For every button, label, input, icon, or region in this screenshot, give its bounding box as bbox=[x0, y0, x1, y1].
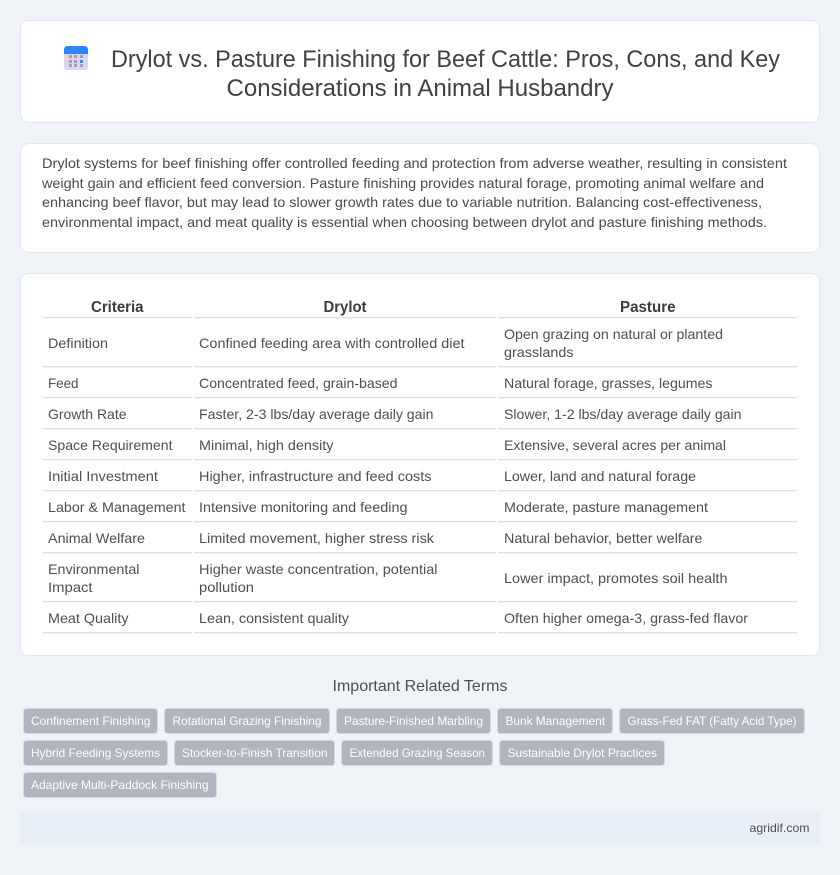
row: Definition: Definition bbox=[48, 335, 108, 351]
tag: Grass-Fed FAT bbox=[620, 708, 804, 734]
tag: Sustainable Drylot Practices bbox=[500, 740, 664, 766]
row: Labor & Management bbox=[48, 499, 708, 515]
table header row: Drylot bbox=[324, 299, 367, 316]
row: Animal Welfare bbox=[48, 530, 703, 546]
row: Definition: Open grazing on natural or planted bbox=[504, 326, 723, 342]
row: Feed bbox=[48, 375, 712, 391]
tag: Rotational Grazing Finishing: Rotational Grazing Finishing bbox=[172, 714, 322, 728]
row: Animal Welfare: Limited movement, higher stress risk bbox=[199, 530, 435, 546]
title: Drylot vs. Pasture Finishing for Beef Cattle: Pros, Cons, and Key bbox=[111, 46, 780, 73]
tag: Hybrid Feeding Systems bbox=[24, 740, 168, 766]
title: Considerations in Animal Husbandry bbox=[226, 75, 614, 102]
row: Meat Quality: Often higher omega-3, grass-fed flavor bbox=[504, 610, 748, 626]
title bbox=[111, 46, 780, 102]
icon: calendar bbox=[64, 46, 88, 70]
row: Labor & Management: Moderate, pasture management bbox=[504, 499, 708, 515]
tag: Confinement Finishing bbox=[24, 708, 158, 734]
tag: Confinement Finishing: Confinement Finishing bbox=[31, 714, 150, 728]
row: Initial Investment: Higher, infrastructure and feed costs bbox=[199, 468, 432, 484]
row: Meat Quality: Lean, consistent quality bbox=[199, 610, 349, 626]
row: Space Requirement bbox=[48, 437, 726, 453]
panel: description bbox=[20, 144, 820, 252]
tag: Pasture-Finished Marbling: Pasture-Finished Marbling bbox=[344, 714, 483, 728]
row: Animal Welfare: Natural behavior, better welfare bbox=[504, 530, 703, 546]
header panel bbox=[20, 20, 820, 122]
footer bar bbox=[20, 811, 820, 845]
row: Definition: grasslands bbox=[504, 344, 574, 360]
row: Definition bbox=[48, 326, 723, 360]
text block: description paragraph: Drylot systems for beef finishing offer controlled feeding and protection from adverse weather, resulting in consistent bbox=[42, 155, 787, 171]
row: Growth Rate: Growth Rate bbox=[48, 406, 127, 422]
row: Initial Investment: Initial Investment bbox=[48, 468, 158, 484]
heading: related terms: Important Related Terms bbox=[332, 678, 508, 695]
tag: Hybrid Feeding Systems: Hybrid Feeding Systems bbox=[31, 746, 160, 760]
tag: Adaptive Multi-Paddock Finishing: Adaptive Multi-Paddock Finishing bbox=[31, 778, 208, 792]
row: Animal Welfare: Animal Welfare bbox=[48, 530, 145, 546]
row: Feed: Concentrated feed, grain-based bbox=[199, 375, 398, 391]
row: Labor & Management: Labor & Management bbox=[48, 499, 186, 515]
row: Labor & Management: Intensive monitoring and feeding bbox=[199, 499, 408, 515]
tag: Sustainable Drylot Practices: Sustainable Drylot Practices bbox=[508, 746, 657, 760]
text block: description paragraph: enhancing beef flavor, but may lead to slower growth rates due to variable nutrition. Balancing cost-effectiveness, bbox=[42, 194, 762, 210]
row: Environmental Impact: Lower impact, promotes soil health bbox=[504, 570, 728, 586]
table header row bbox=[91, 299, 676, 316]
row: Environmental Impact bbox=[48, 561, 728, 595]
text block: description paragraph: environmental impact, and meat quality is essential when choosing between drylot and pasture finishing methods. bbox=[42, 214, 767, 230]
row: Environmental Impact: Impact bbox=[48, 579, 93, 595]
tag: Grass-Fed FAT: Grass-Fed FAT (Fatty Acid Type) bbox=[628, 714, 796, 728]
row: Space Requirement: Minimal, high density bbox=[199, 437, 334, 453]
row: Initial Investment bbox=[48, 468, 696, 484]
footer text: agridif.com bbox=[750, 821, 810, 835]
tag: Stocker-to-Finish Transition: Stocker-to-Finish Transition bbox=[182, 746, 328, 760]
tag: Extended Grazing Season bbox=[342, 740, 492, 766]
row: Space Requirement: Space Requirement bbox=[48, 437, 173, 453]
tag: Adaptive Multi-Paddock Finishing bbox=[24, 772, 216, 798]
tag: Bunk Management: Bunk Management bbox=[506, 714, 606, 728]
row: Feed: Natural forage, grasses, legumes bbox=[504, 375, 712, 391]
row: Environmental Impact: Environmental bbox=[48, 561, 140, 577]
row: Environmental Impact: pollution bbox=[199, 579, 254, 595]
row: Meat Quality bbox=[48, 610, 748, 626]
text block: description paragraph bbox=[41, 155, 787, 230]
row: Definition: Confined feeding area with controlled diet bbox=[199, 335, 465, 351]
row: Initial Investment: Lower, land and natural forage bbox=[504, 468, 696, 484]
tag list: related terms bbox=[24, 708, 804, 798]
tag: Bunk Management bbox=[498, 708, 612, 734]
text block: description paragraph: weight gain and efficient feed conversion. Pasture finishing provides natural forage, promoting animal welfare and bbox=[41, 175, 764, 191]
tag: Extended Grazing Season: Extended Grazing Season bbox=[350, 746, 485, 760]
table header row: Criteria bbox=[91, 299, 144, 316]
tag: Rotational Grazing Finishing bbox=[164, 708, 330, 734]
row: Feed: Feed bbox=[48, 375, 78, 391]
row: Growth Rate: Slower, 1-2 lbs/day average daily gain bbox=[504, 406, 742, 422]
row: Growth Rate: Faster, 2-3 lbs/day average daily gain bbox=[199, 406, 434, 422]
row: Meat Quality: Meat Quality bbox=[48, 610, 128, 626]
table header row: Pasture bbox=[620, 299, 676, 316]
tag: Stocker-to-Finish Transition bbox=[174, 740, 334, 766]
row: Space Requirement: Extensive, several acres per animal bbox=[504, 437, 726, 453]
row: Growth Rate bbox=[48, 406, 742, 422]
panel: comparison table bbox=[20, 274, 820, 656]
row: Environmental Impact: Higher waste concentration, potential bbox=[199, 561, 438, 577]
tag: Pasture-Finished Marbling bbox=[336, 708, 490, 734]
